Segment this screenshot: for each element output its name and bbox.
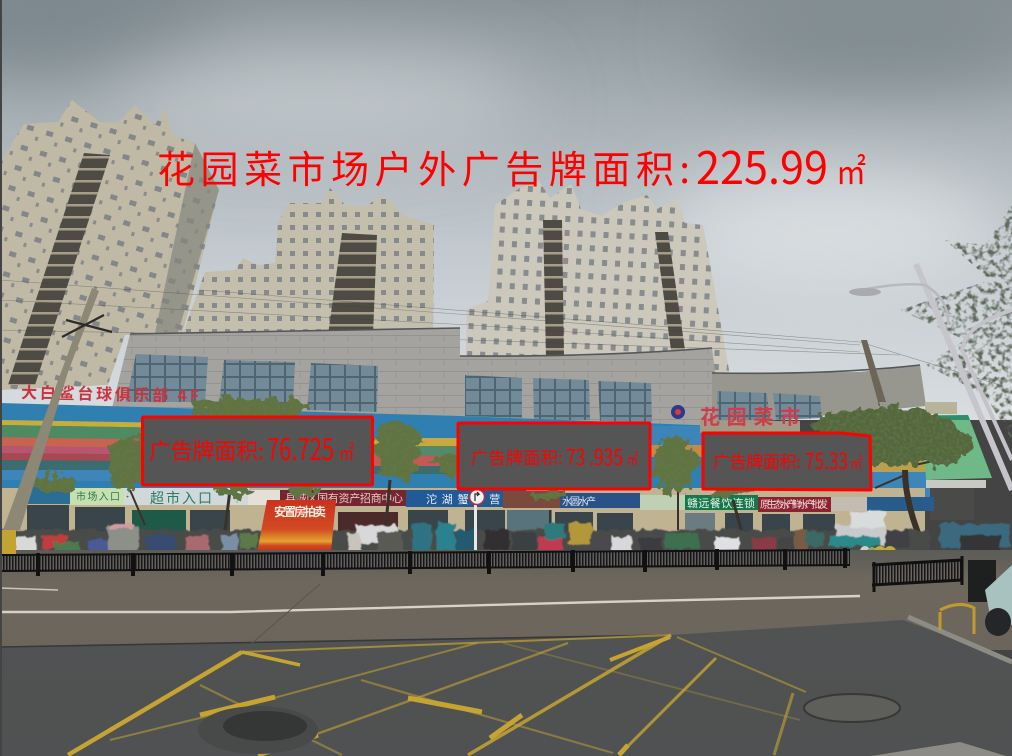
auction banner: 安置房拍卖 bbox=[274, 503, 326, 520]
tree trunks bbox=[130, 455, 960, 555]
yellow road markings bbox=[68, 635, 806, 755]
billboard box: 75.33: 75.33 bbox=[805, 444, 848, 476]
overhead power lines bbox=[0, 280, 1000, 385]
shopfronts: 县城区国有资产招商中心 bbox=[285, 490, 403, 506]
left image edge bbox=[0, 0, 2, 756]
street trees bbox=[37, 398, 971, 499]
billboard box: 73.935: 73 .935 bbox=[566, 440, 623, 472]
shopfronts: 沱湖蟹专营店 bbox=[426, 491, 516, 507]
glass windows bbox=[126, 354, 822, 422]
title: 225.99 bbox=[696, 132, 828, 197]
title bbox=[157, 132, 866, 197]
shop doors and windows bbox=[27, 505, 835, 540]
market building upper facade bbox=[112, 328, 926, 426]
road sign bbox=[470, 490, 484, 554]
scooter and bicycle rack at right bbox=[940, 560, 1012, 636]
shopfronts: 水圆水产 bbox=[562, 493, 596, 508]
billboard box: 76.725: 76.725 bbox=[267, 425, 334, 469]
roadside fence bbox=[0, 548, 962, 592]
billboard box: 76.725: ㎡ bbox=[339, 437, 354, 466]
market rooftop signs: 花园菜市 bbox=[700, 401, 800, 430]
market rooftop signs: 大白鲨台球俱乐部 4F bbox=[21, 379, 199, 407]
billboard box: 75.33 bbox=[703, 433, 871, 490]
green building at right bbox=[922, 402, 992, 520]
middle residential tower bbox=[183, 188, 434, 340]
billboard box: 73.935: 广告牌面积: bbox=[471, 444, 563, 469]
yellow and green bollard balls bbox=[860, 546, 896, 558]
market rooftop signs bbox=[21, 379, 800, 433]
auction banner bbox=[257, 500, 336, 553]
concrete utility pole at left bbox=[2, 288, 112, 554]
billboard box: 75.33: 广告牌面积: bbox=[713, 448, 801, 473]
feathery tree at right edge bbox=[900, 205, 1012, 440]
parked scooters and tricycles bbox=[0, 512, 1010, 555]
shopfronts: 超市入口 bbox=[150, 488, 212, 508]
left residential tower bbox=[0, 100, 219, 390]
shopfronts: 市场入口 bbox=[76, 488, 120, 503]
title: 花园菜市场户外广告牌面积: bbox=[157, 139, 690, 194]
billboard box: 75.33: ㎡ bbox=[850, 450, 862, 474]
billboard box: 73.935 bbox=[458, 423, 650, 489]
billboard box: 76.725: 广告牌面积: bbox=[149, 434, 264, 466]
street lamp bbox=[849, 264, 1012, 490]
shopfronts: 赣远餐饮连锁 bbox=[687, 495, 755, 511]
rainbow striped wall band bbox=[0, 403, 931, 498]
billboard box: 76.725 bbox=[142, 417, 372, 485]
utility pole at right bbox=[861, 340, 886, 402]
billboard box: 73.935: ㎡ bbox=[627, 446, 638, 470]
right residential tower bbox=[465, 181, 731, 381]
manhole covers bbox=[198, 694, 900, 754]
shopfronts bbox=[0, 487, 934, 550]
road surface bbox=[0, 550, 1012, 756]
sky bbox=[0, 0, 1012, 420]
shopfronts: 原生态水产 鲜水产批发 bbox=[760, 496, 828, 511]
title: ㎡ bbox=[836, 145, 866, 194]
